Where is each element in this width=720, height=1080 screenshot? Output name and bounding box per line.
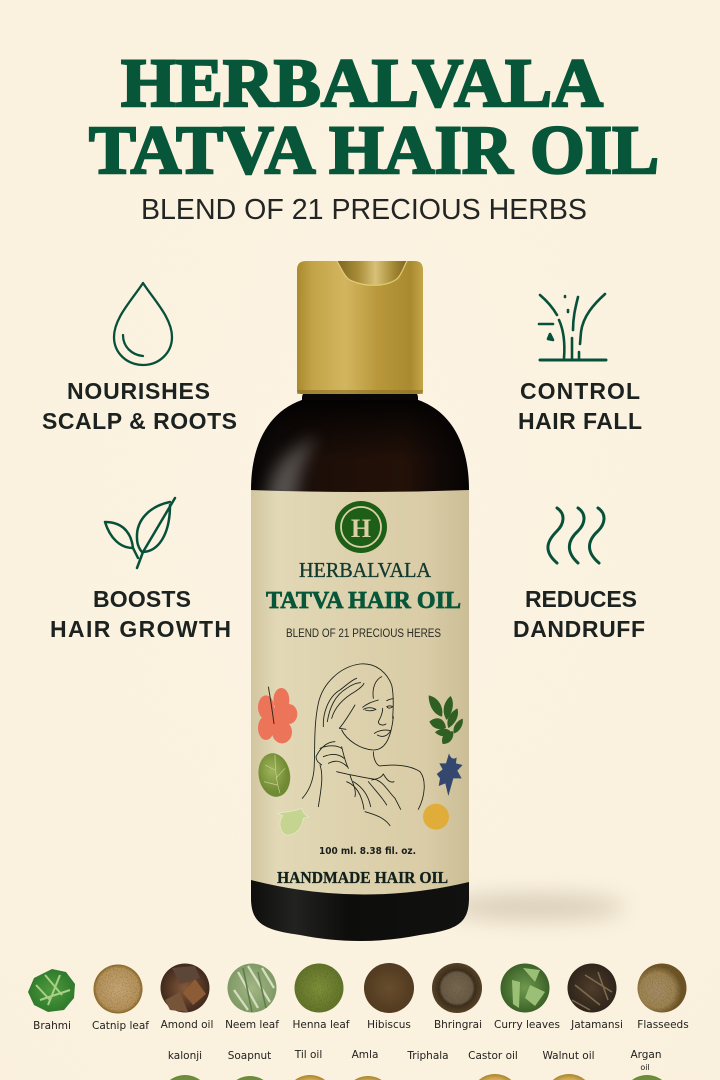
- feature: control hair fall: HAIR FALL: [518, 408, 642, 434]
- glass highlight: [268, 436, 318, 505]
- icon: oil drop: [114, 283, 172, 365]
- ingredient: amond oil: [160, 964, 213, 1031]
- ingredient: catnip leaf: Catnip leaf: [92, 1020, 149, 1032]
- ingredient: jatamansi: [568, 964, 623, 1031]
- bottle base: [251, 860, 469, 941]
- ingredient: bhringrai: [432, 963, 482, 1031]
- ingredients row two labels: Til oil: [294, 1049, 322, 1061]
- icon: waves: [548, 508, 604, 563]
- ingredient: brahmi: [28, 969, 75, 1032]
- feature: reduces dandruff: REDUCES: [525, 586, 637, 612]
- ingredient: flasseeds: [637, 964, 689, 1031]
- bottle neck: [302, 392, 418, 416]
- curry leaf sprig: [429, 695, 463, 744]
- bottle glass shoulder: [251, 400, 469, 492]
- betel leaf: [255, 751, 294, 799]
- handmade line: HANDMADE HAIR OIL: [277, 868, 448, 887]
- ingredient: neem leaf: Neem leaf: [225, 1019, 279, 1031]
- title: HERBALVALA: [121, 45, 603, 121]
- net volume: 100 ml. 8.38 fil. oz.: [319, 846, 416, 857]
- logo badge: [335, 501, 387, 553]
- feature: nourishes scalp and roots: [42, 283, 237, 434]
- feature: boosts hair growth: BOOSTS: [93, 586, 191, 612]
- title: TATVA HAIR OIL: [89, 112, 659, 188]
- paper label: [251, 490, 469, 895]
- label tagline: BLEND OF 21 PRECIOUS HERES: [286, 628, 441, 640]
- label art: woman and botanicals: [255, 664, 463, 835]
- ingredients row two labels: Amla: [352, 1049, 378, 1061]
- ingredients row two labels: Argan: [630, 1049, 662, 1061]
- subtitle: BLEND OF 21 PRECIOUS HERBS: [141, 194, 587, 226]
- ingredients row two labels: Castor oil: [468, 1050, 518, 1062]
- ingredient: neem leaf: [225, 964, 279, 1031]
- ingredient: curry leaves: Curry leaves: [494, 1019, 560, 1031]
- icon: hair fall: [539, 294, 606, 360]
- ingredient: hibiscus: [364, 963, 414, 1031]
- ingredients row one: [28, 963, 689, 1032]
- blue flower: [437, 753, 463, 796]
- ingredients row two images: [160, 1074, 672, 1080]
- feature: control hair fall: CONTROL: [520, 378, 640, 404]
- logo badge: H: [351, 514, 371, 543]
- product bottle: [251, 261, 469, 941]
- feature: reduces dandruff: [513, 508, 645, 642]
- ingredient: amond oil: Amond oil: [161, 1019, 213, 1031]
- ingredient: henna leaf: [293, 964, 350, 1031]
- ingredients row two labels: [168, 1049, 662, 1072]
- feature: nourishes scalp and roots: SCALP & ROOTS: [42, 408, 237, 434]
- product name: TATVA HAIR OIL: [266, 588, 461, 614]
- ingredients row two labels: kalonji: [168, 1050, 202, 1062]
- ingredient: flasseeds: Flasseeds: [637, 1019, 689, 1031]
- feature: reduces dandruff: DANDRUFF: [513, 616, 645, 642]
- ingredients row two labels: Triphala: [406, 1050, 449, 1062]
- feature: nourishes scalp and roots: NOURISHES: [67, 378, 210, 404]
- ingredients row two labels: oil: [640, 1063, 650, 1072]
- ingredient: henna leaf: Henna leaf: [293, 1019, 350, 1031]
- ingredient: bhringrai: Bhringrai: [434, 1019, 482, 1031]
- bottle shadow: [445, 894, 625, 920]
- feature: boosts hair growth: HAIR GROWTH: [50, 616, 231, 642]
- feature: control hair fall: [518, 294, 642, 434]
- ingredient: brahmi: Brahmi: [33, 1020, 71, 1032]
- feature: boosts hair growth: [50, 498, 231, 642]
- hibiscus: [258, 687, 297, 743]
- icon: leaf sprout: [105, 498, 175, 568]
- ingredient: catnip leaf: [92, 964, 149, 1032]
- aloe slice: [278, 808, 308, 835]
- line drawing: woman: [302, 664, 424, 826]
- brand name: HERBALVALA: [299, 558, 432, 582]
- ingredient: jatamansi: Jatamansi: [570, 1019, 623, 1031]
- title: [89, 45, 659, 188]
- ingredient: hibiscus: Hibiscus: [367, 1019, 411, 1031]
- yellow flower: [423, 804, 449, 830]
- ingredient: curry leaves: [494, 964, 560, 1031]
- ingredients row two labels: Soapnut: [228, 1050, 271, 1062]
- ingredients row two labels: Walnut oil: [542, 1050, 595, 1062]
- flip-top cap: [297, 261, 423, 394]
